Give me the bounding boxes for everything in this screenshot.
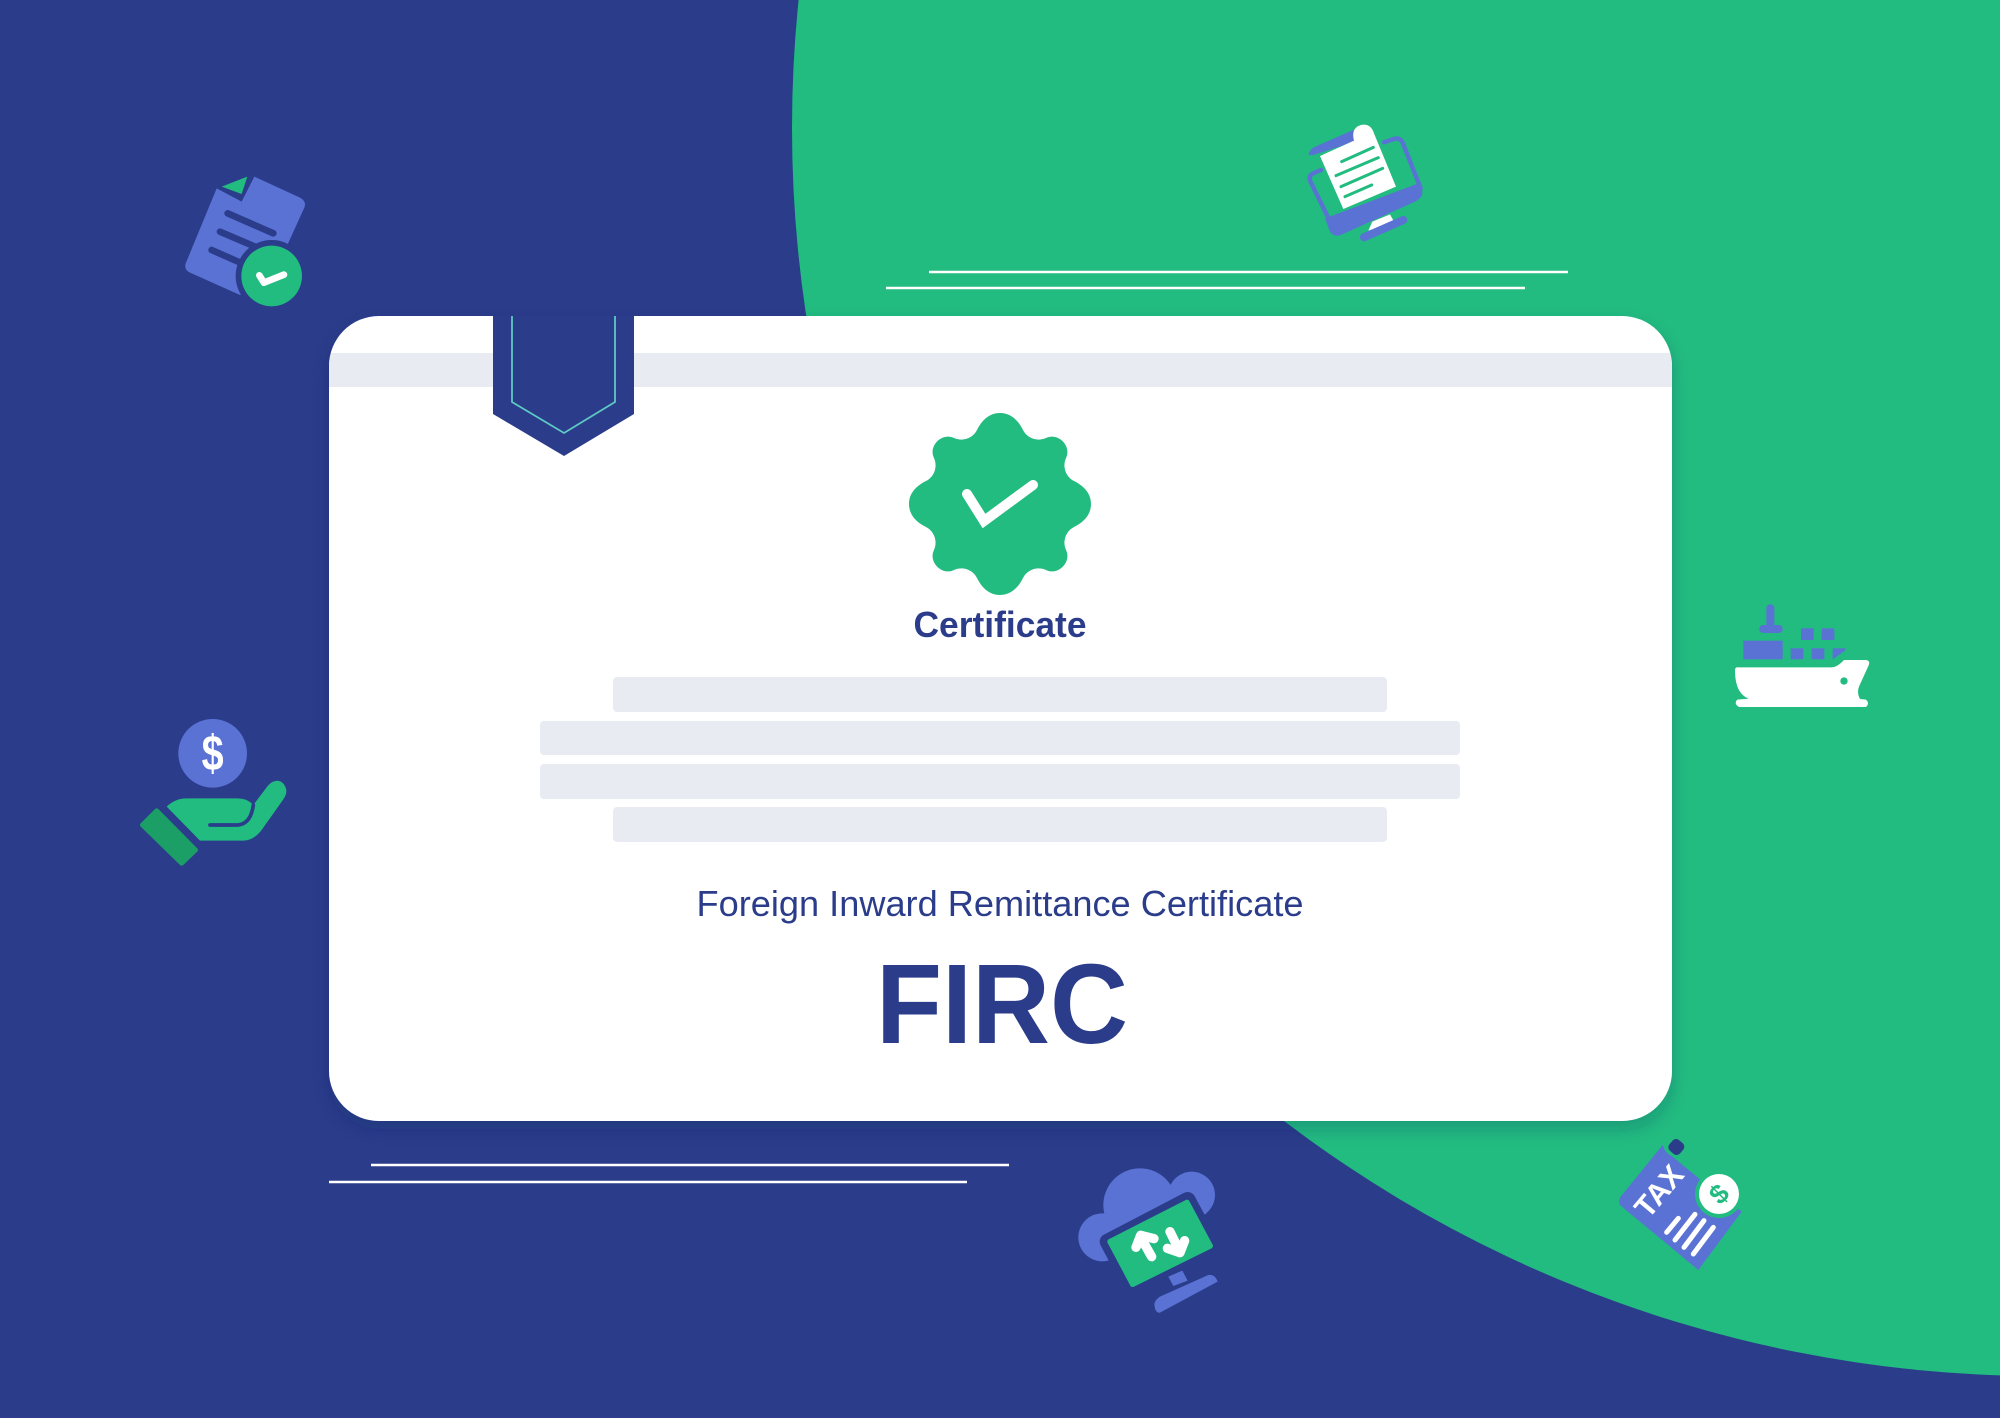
card body [329,316,1672,1121]
scroll paper [1320,125,1396,209]
ship cargo and mast [1743,604,1845,659]
ribbon inner outline [512,316,615,433]
dollar sign: $ [202,726,224,782]
icon: certificate badge [909,413,1091,595]
decorative lines top right [886,272,1568,288]
monitor bezel [1108,1200,1213,1287]
hand [167,781,286,841]
document sheet [185,177,305,295]
coin dollar sign: $ [1703,1178,1735,1210]
card header band [329,353,1672,387]
ribbon shape [493,316,634,456]
monitor left frame [1310,170,1329,220]
monitor screen [1110,1202,1210,1284]
background: green circle [792,0,2000,1376]
document lines [212,213,273,264]
subtitle: Foreign Inward Remittance Certificate [696,883,1304,924]
check circle outline [236,240,308,312]
coin ring [1695,1170,1743,1218]
icon: hand with dollar coin [142,719,286,863]
cuff [142,811,196,863]
icon: approved document [185,177,308,312]
monitor neck [1168,1271,1188,1286]
tax sheet [1619,1145,1742,1270]
panel: certificate card [329,316,1672,1121]
monitor base [1154,1275,1218,1313]
placeholder text bars [540,677,1460,842]
TAX label: TAX [1628,1159,1691,1224]
decorative lines bottom left [329,1165,1009,1182]
icon: monitor with document [1308,125,1422,237]
monitor stand [1368,214,1395,231]
tax sheet tab [1666,1137,1686,1157]
icon: tax document [1619,1137,1743,1270]
cloud [1078,1168,1215,1261]
ship hull [1735,660,1869,707]
down arrow [1167,1232,1185,1253]
check mark [259,275,284,283]
coin [1699,1174,1739,1214]
coin [178,719,247,788]
badge seal [909,413,1091,595]
badge check mark [967,485,1033,521]
ship porthole [1840,677,1848,685]
finger crease [210,805,253,825]
check circle [241,246,302,306]
title: FIRC: FIRC [876,941,1128,1067]
monitor right frame [1384,139,1421,188]
scroll back bar [1308,130,1355,155]
scroll lines [1336,147,1383,197]
up arrow [1136,1235,1154,1257]
tax sheet lines [1667,1214,1713,1254]
icon: cargo ship [1735,604,1869,707]
heading: Certificate: Certificate [914,604,1086,645]
icon: cloud transfer monitor [1078,1168,1218,1313]
ribbon bookmark [493,316,634,456]
monitor foot [1364,220,1403,237]
folded corner [222,177,247,194]
monitor bottom bar [1325,183,1422,236]
